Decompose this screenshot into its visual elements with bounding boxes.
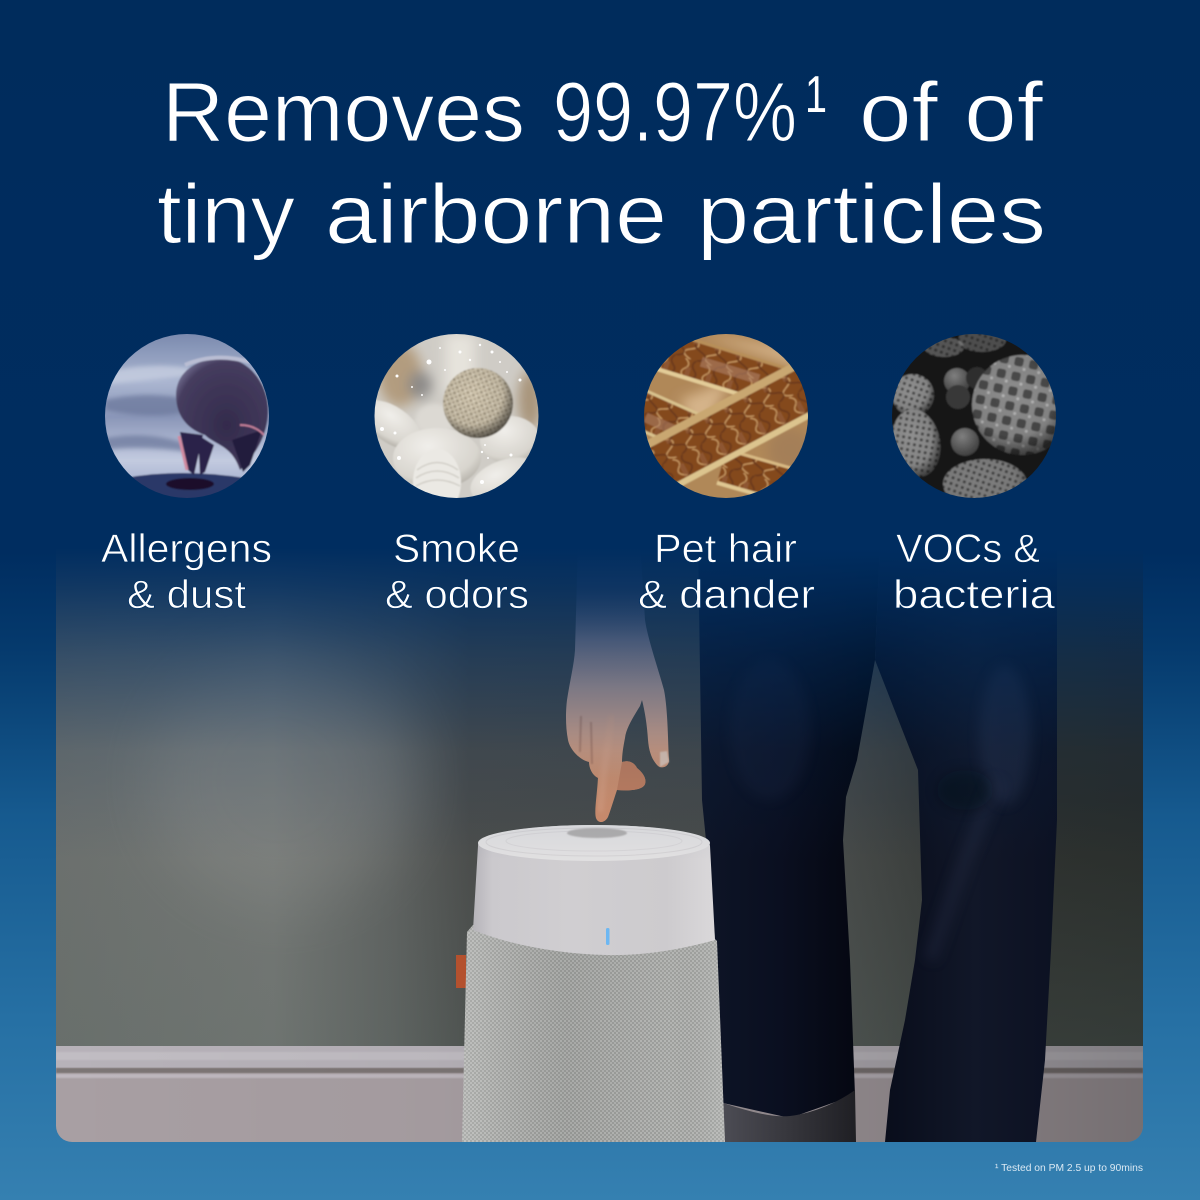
footnote: ¹ Tested on PM 2.5 up to 90mins	[995, 1162, 1143, 1174]
white cap	[473, 825, 715, 955]
title: of of	[859, 65, 1044, 159]
label: VOCs & bacteria: bacteria	[893, 573, 1056, 617]
icon: VOC and bacteria micrograph	[892, 334, 1056, 498]
title: particles	[697, 167, 1046, 261]
hair strand top	[657, 341, 783, 395]
title: airborne	[325, 167, 667, 261]
hair strand left	[644, 390, 698, 438]
top fade overlay	[56, 540, 1143, 830]
jeans: right leg	[875, 540, 1057, 1142]
air purifier	[456, 825, 725, 1142]
hair strand back	[716, 452, 791, 494]
label: Pet hair & dander	[638, 527, 815, 617]
title: Removes	[162, 65, 525, 159]
cap top face	[478, 825, 710, 861]
label: Smoke & odors	[385, 527, 529, 617]
item: allergens and dust	[100, 330, 274, 617]
hair strand large	[648, 365, 808, 486]
panel: photo of person pressing air purifier	[56, 540, 1143, 1142]
icon: dust mite micrograph	[105, 334, 269, 498]
title: 1	[805, 66, 827, 124]
label: VOCs & bacteria	[893, 527, 1056, 617]
label: VOCs & bacteria: VOCs &	[896, 527, 1040, 571]
jeans: rolled cuff	[723, 1090, 856, 1142]
label: Smoke & odors: Smoke	[393, 527, 520, 571]
blue indicator light	[606, 928, 610, 945]
label: Pet hair & dander: & dander	[638, 573, 815, 617]
skirting board	[56, 1046, 1143, 1142]
fabric body	[462, 925, 725, 1142]
icon: smoke particle micrograph	[374, 334, 538, 498]
title: tiny	[157, 167, 295, 261]
label: Allergens & dust	[101, 527, 272, 617]
orange tab	[456, 955, 466, 988]
label: Allergens & dust: Allergens	[101, 527, 272, 571]
label: Pet hair & dander: Pet hair	[654, 527, 797, 571]
title: 99.97%	[553, 65, 797, 159]
item: smoke and odors	[374, 334, 538, 609]
hand pressing button	[566, 596, 670, 822]
title	[157, 65, 1046, 261]
item: VOCs and bacteria	[892, 334, 1056, 609]
wall	[56, 540, 1143, 1050]
label: Allergens & dust: & dust	[127, 573, 246, 617]
jeans: left leg	[698, 540, 880, 1118]
item: pet hair and dander	[639, 334, 814, 609]
icon: pet hair micrograph	[644, 334, 808, 498]
label: Smoke & odors: & odors	[385, 573, 529, 617]
